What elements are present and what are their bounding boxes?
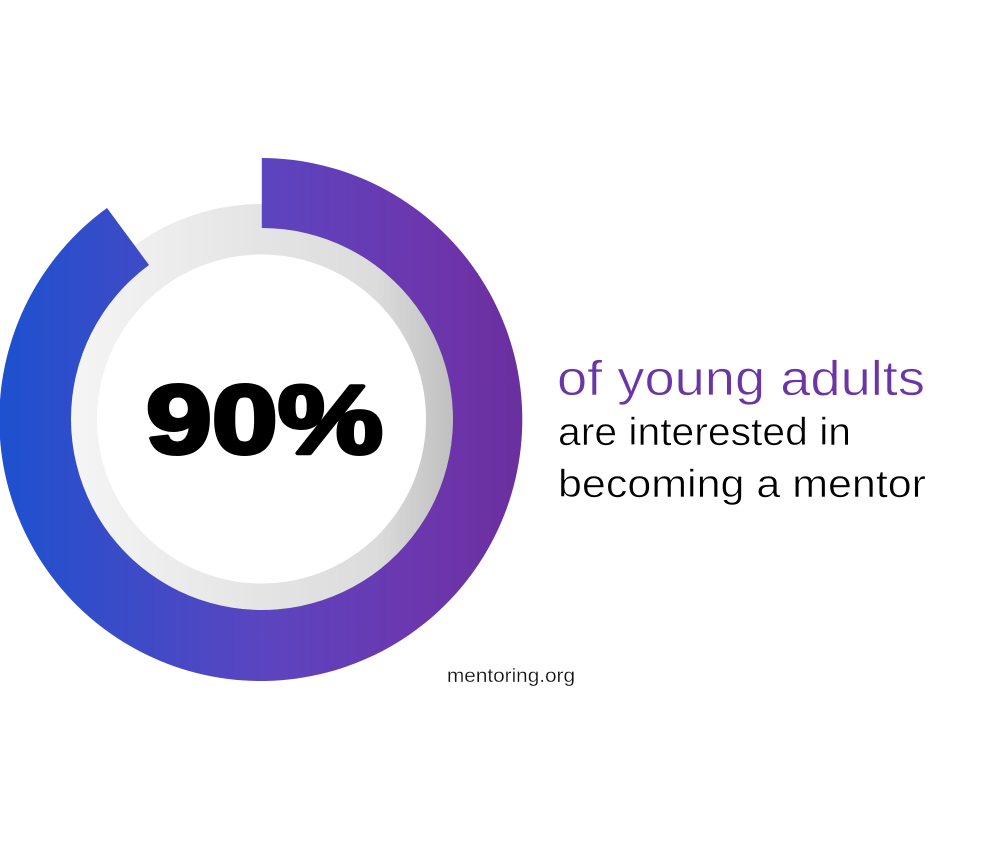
highlighted line: of young adults [557, 352, 925, 406]
donut chart: 90% [0, 158, 522, 681]
line three: becoming a mentor [558, 463, 926, 506]
source credit: mentoring.org [447, 666, 575, 687]
line two: are interested in [558, 411, 851, 454]
grey track ring [47, 204, 477, 634]
statement text [557, 352, 926, 506]
gradient progress arc [0, 158, 522, 681]
big number: 90% [146, 365, 383, 474]
